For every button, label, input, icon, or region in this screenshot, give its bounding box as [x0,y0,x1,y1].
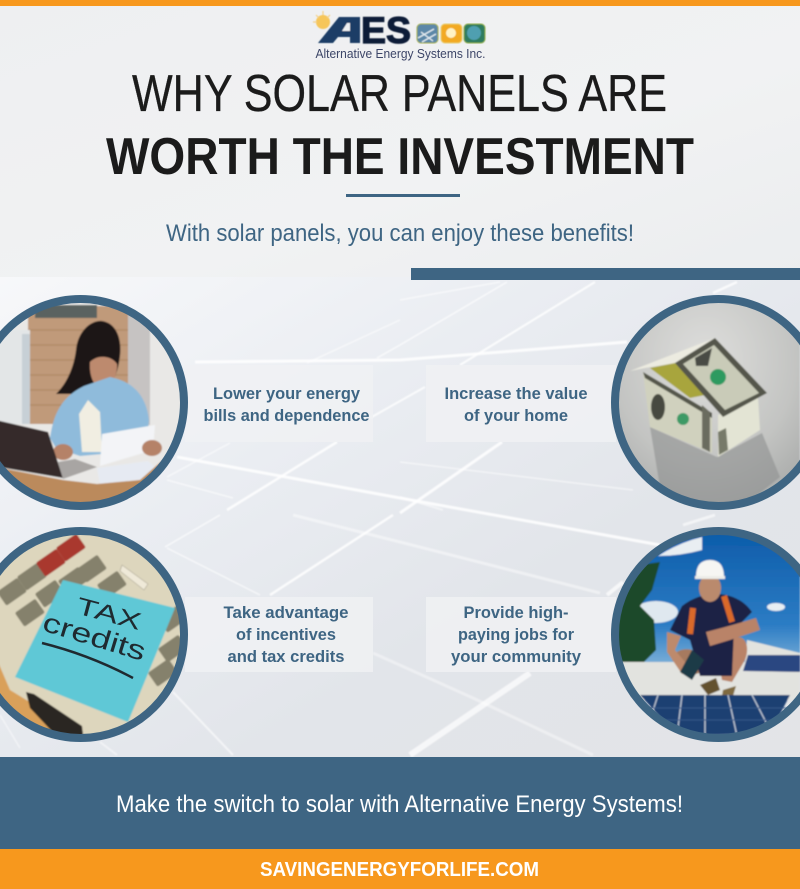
photo: house made of dollar bills [610,295,800,510]
shadow [650,427,780,505]
photo: tax credits note on calculator [0,525,190,742]
photo ring [0,299,184,506]
side wall [718,397,760,457]
text box: jobs: Provide high- [464,604,568,622]
logo: Alternative Energy Systems [313,10,486,61]
title [106,65,694,186]
text box: jobs [426,597,616,672]
clouds [658,537,702,556]
text box: tax credits: and tax credits [228,648,344,666]
photo ring [0,531,184,738]
text box: tax credits: Take advantage [224,604,348,622]
subtitle: With solar panels, you can enjoy these benefits! [166,220,634,247]
head and helmet [699,574,721,602]
section band [411,268,800,280]
title line 2: WORTH THE INVESTMENT [106,128,694,186]
text box: lower energy bills [185,365,373,442]
papers [100,425,155,466]
photo: woman with laptop and bills [0,295,190,515]
hair [56,321,120,394]
roof [622,640,800,700]
text box: tax credits [185,597,373,672]
handwritten note text: credits [39,607,149,667]
handwritten note text [44,597,144,660]
logo tagline: Alternative Energy Systems Inc. [316,46,486,61]
text box: home value [426,365,616,442]
laptop [0,414,63,478]
website footer: SAVINGENERGYFORLIFE.COM [260,859,539,881]
roof overhang [632,340,711,370]
arms [666,631,686,674]
calculator body [0,535,180,734]
logo sun [313,11,330,29]
interior [650,363,705,398]
top orange bar [0,0,800,6]
title line 1: WHY SOLAR PANELS ARE [132,65,667,123]
text box: tax credits: of incentives [236,626,336,644]
slider [120,565,148,590]
front wall [643,372,712,453]
tree [618,562,660,662]
photo ring [615,531,800,738]
solar panel background panel [0,277,800,757]
header background [0,0,800,278]
solar panel [640,695,790,736]
call-to-action banner: Make the switch to solar with Alternative Energy Systems! [116,791,683,818]
text box: jobs: your community [451,648,582,666]
photo ring [615,299,800,506]
top [79,400,102,452]
text box: home value: Increase the value [444,385,588,403]
call-to-action banner [0,757,800,849]
logo letters AES [318,10,411,51]
calculator keys [0,555,188,687]
text box: home value: of your home [464,407,568,425]
handwritten note text: TAX [73,593,144,636]
boots [700,678,720,695]
roof panel [675,338,767,417]
photo: solar installer on a roof [610,527,800,738]
website footer [0,849,800,889]
title divider [346,194,460,197]
logo icon tiles [417,24,485,43]
marker pen [25,691,84,734]
text box: jobs: paying jobs for [458,626,575,644]
hands [142,440,162,456]
drill [680,650,704,680]
text box: lower energy bills: bills and dependence [204,407,370,425]
shirt [50,377,149,456]
shirt [670,594,752,676]
logo letters AES: ES [361,10,411,51]
legs [721,637,747,682]
text box: lower energy bills: Lower your energy [213,385,361,403]
sticky note [15,580,175,722]
face [90,357,117,388]
table [6,460,162,502]
